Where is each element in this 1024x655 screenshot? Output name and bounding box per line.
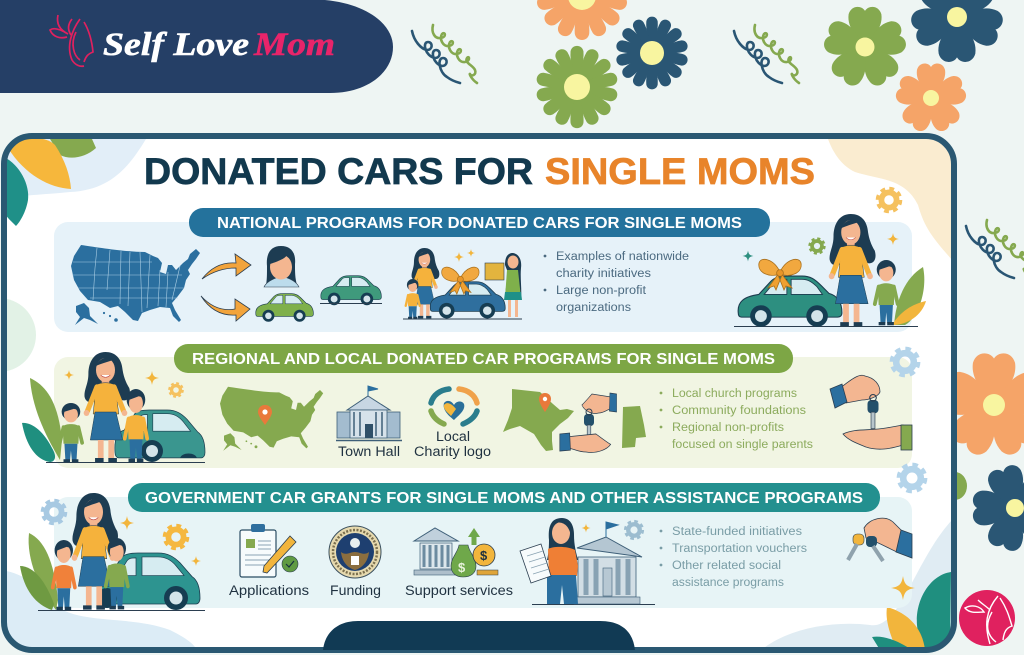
illustration: mom with two kids and car <box>22 352 205 462</box>
icon: government seal <box>329 526 381 578</box>
text: regional bullets: Community foundations <box>672 405 806 417</box>
heading: government grants: GOVERNMENT CAR GRANTS FOR SINGLE MOMS AND OTHER ASSISTANCE PROGRAMS <box>145 490 863 507</box>
text: regional bullets: Regional non-profits <box>672 422 784 434</box>
map: second state <box>622 406 646 448</box>
card corner decorations <box>0 138 952 655</box>
text: regional bullets: focused on single parents <box>672 439 813 451</box>
icon: woman portrait <box>264 246 299 287</box>
arrow: map to car <box>201 296 250 321</box>
map: state with pin <box>503 389 574 451</box>
header logo banner <box>0 0 393 93</box>
icon: circular brand badge <box>959 590 1015 646</box>
icon: orange gear <box>169 383 183 397</box>
label: funding: Funding <box>330 583 381 598</box>
label: applications: Applications <box>229 583 309 598</box>
icon: green car <box>256 294 313 322</box>
map: US with pin <box>220 387 323 451</box>
text: national bullets: organizations <box>556 302 631 314</box>
text: government bullets: State-funded initiatives <box>672 526 802 538</box>
heading: government grants <box>128 483 880 512</box>
text: government bullets <box>660 526 807 589</box>
decorative flowers <box>535 0 1024 553</box>
title <box>144 151 815 192</box>
label: local charity logo <box>414 429 491 459</box>
icon: green gear <box>810 239 824 253</box>
label: local charity logo: Local <box>436 429 470 444</box>
text: regional bullets: Local church programs <box>672 388 797 400</box>
map: United States <box>71 245 200 325</box>
icon: light blue gear <box>892 349 918 375</box>
bottom dark tab <box>323 621 635 650</box>
illustration: woman with document at government building <box>520 518 655 604</box>
text: government bullets: Other related social <box>672 560 781 572</box>
icon: gear and sparkle <box>582 521 643 539</box>
illustration: mom with two kids and teal car <box>20 493 205 610</box>
icon: sparkles <box>742 233 899 262</box>
icon: orange gear <box>878 189 900 211</box>
text: government bullets: Transportation vouchers <box>672 543 807 555</box>
icon: town hall <box>336 386 402 440</box>
icon: hand with keys <box>848 518 912 561</box>
panel: government grants <box>20 483 912 610</box>
text: national bullets: charity initiatives <box>556 268 651 280</box>
text: national bullets: Examples of nationwide <box>556 251 689 263</box>
icon: sparkles <box>64 370 159 385</box>
icon: teal car <box>320 276 382 305</box>
brand name accent: Mom <box>253 27 335 63</box>
text: national bullets <box>544 251 689 314</box>
panel: national programs <box>54 189 926 332</box>
text: regional bullets <box>660 388 813 451</box>
illustration: family receiving car with bow <box>403 248 522 319</box>
label: support services: Support services <box>405 583 513 598</box>
icon: yellow sparkle <box>891 576 915 600</box>
icon: local charity logo <box>431 389 477 424</box>
icon: hands with car key <box>830 375 912 450</box>
main card <box>0 136 954 655</box>
decorative squiggles <box>412 25 1024 278</box>
title: SINGLE MOMS <box>545 151 815 192</box>
heading: regional and local <box>174 344 793 373</box>
heading: regional and local: REGIONAL AND LOCAL DONATED CAR PROGRAMS FOR SINGLE MOMS <box>192 351 775 368</box>
text: national bullets: Large non-profit <box>556 285 647 297</box>
icon: light blue gear <box>899 465 925 491</box>
icon: hands passing key <box>560 393 617 452</box>
label: local charity logo: Charity logo <box>414 444 491 459</box>
heading: national programs: NATIONAL PROGRAMS FOR DONATED CARS FOR SINGLE MOMS <box>217 215 742 232</box>
text: government bullets: assistance programs <box>672 577 784 589</box>
title: DONATED CARS FOR <box>144 151 533 192</box>
arrow: map to person <box>202 254 251 279</box>
icon: woman and butterfly logo <box>50 15 93 66</box>
icon: bank with money <box>414 528 498 577</box>
label: town hall: Town Hall <box>338 444 400 459</box>
illustration: mom and son with gift car <box>734 214 926 327</box>
icon: gears and sparkles <box>43 501 201 566</box>
icon: bank with money: $ <box>458 560 466 575</box>
icon: bank with money: $ <box>480 548 488 563</box>
panel: regional and local programs <box>22 344 912 468</box>
heading: national programs <box>189 208 770 237</box>
brand name: Self Love <box>103 27 249 63</box>
icon: application clipboard <box>240 524 298 577</box>
